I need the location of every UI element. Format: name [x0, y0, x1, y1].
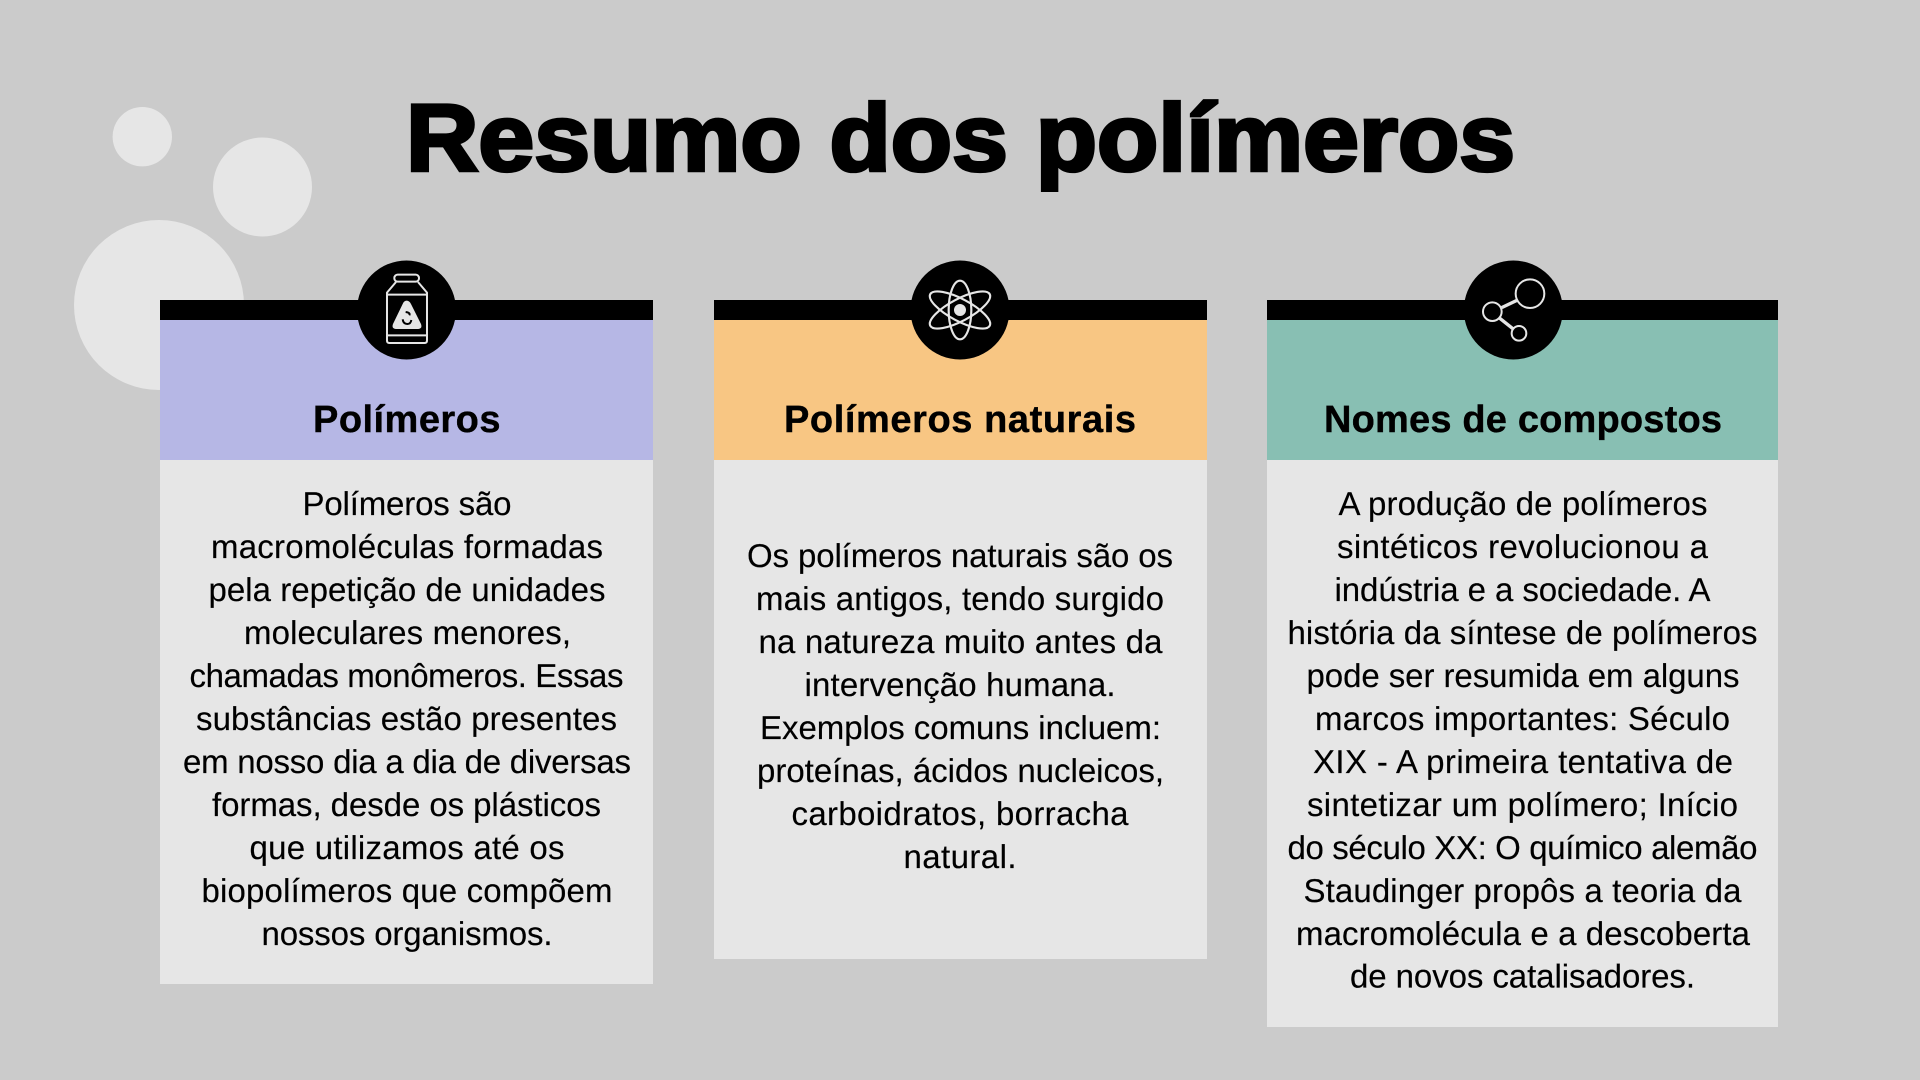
panel body background — [714, 460, 1207, 959]
panel: Nomes de compostos — [1267, 260, 1778, 1027]
body text: do século XX: O químico alemão — [1288, 829, 1758, 866]
body text: sintéticos revolucionou a — [1337, 528, 1709, 565]
panel body background — [160, 460, 653, 984]
body text: proteínas, ácidos nucleicos, — [757, 752, 1164, 789]
body text: na natureza muito antes da — [758, 623, 1163, 660]
heading: Nomes de compostos — [1324, 399, 1722, 441]
body text: nossos organismos. — [262, 915, 552, 952]
icon: share nodes — [1464, 260, 1563, 360]
body text: formas, desde os plásticos — [212, 786, 601, 823]
body text: sintetizar um polímero; Início — [1307, 786, 1738, 823]
body text — [747, 537, 1173, 875]
body text: pode ser resumida em alguns — [1306, 657, 1740, 694]
body text — [1288, 485, 1758, 994]
body text: indústria e a sociedade. A — [1334, 571, 1710, 608]
body text: A produção de polímeros — [1338, 485, 1708, 522]
body text — [183, 485, 631, 952]
top black bar — [160, 300, 653, 320]
body text: mais antigos, tendo surgido — [756, 580, 1164, 617]
body text: em nosso dia a dia de diversas — [183, 743, 631, 780]
header band — [1267, 320, 1778, 460]
panel: Polímeros naturais — [714, 260, 1207, 959]
body text: que utilizamos até os — [250, 829, 564, 866]
body text: substâncias estão presentes — [196, 700, 617, 737]
body text: carboidratos, borracha — [792, 795, 1129, 832]
title: Resumo dos polímeros — [406, 86, 1515, 192]
header band — [160, 320, 653, 460]
body text: Staudinger propôs a teoria da — [1304, 872, 1742, 909]
body text: macromoléculas formadas — [211, 528, 603, 565]
body text: intervenção humana. — [804, 666, 1116, 703]
decorative circles — [74, 107, 312, 390]
top black bar — [714, 300, 1207, 320]
body text: natural. — [904, 838, 1016, 875]
body text: marcos importantes: Século — [1315, 700, 1730, 737]
heading: Polímeros — [313, 399, 500, 441]
body text: moleculares menores, — [244, 614, 571, 651]
body text: chamadas monômeros. Essas — [190, 657, 624, 694]
top black bar — [1267, 300, 1778, 320]
body text: Exemplos comuns incluem: — [760, 709, 1161, 746]
body text: Os polímeros naturais são os — [747, 537, 1173, 574]
body text: macromolécula e a descoberta — [1296, 915, 1751, 952]
panel: Polímeros — [160, 260, 653, 984]
body text: pela repetição de unidades — [208, 571, 606, 608]
heading: Polímeros naturais — [784, 399, 1136, 441]
panel body background — [1267, 460, 1778, 1027]
body text: XIX - A primeira tentativa de — [1313, 743, 1733, 780]
icon: atom — [910, 260, 1010, 360]
header band — [714, 320, 1207, 460]
icon: bottle — [357, 260, 456, 360]
body text: de novos catalisadores. — [1350, 958, 1695, 994]
body text: história da síntese de polímeros — [1288, 614, 1758, 651]
body text: Polímeros são — [302, 485, 512, 522]
body text: biopolímeros que compõem — [202, 872, 612, 909]
